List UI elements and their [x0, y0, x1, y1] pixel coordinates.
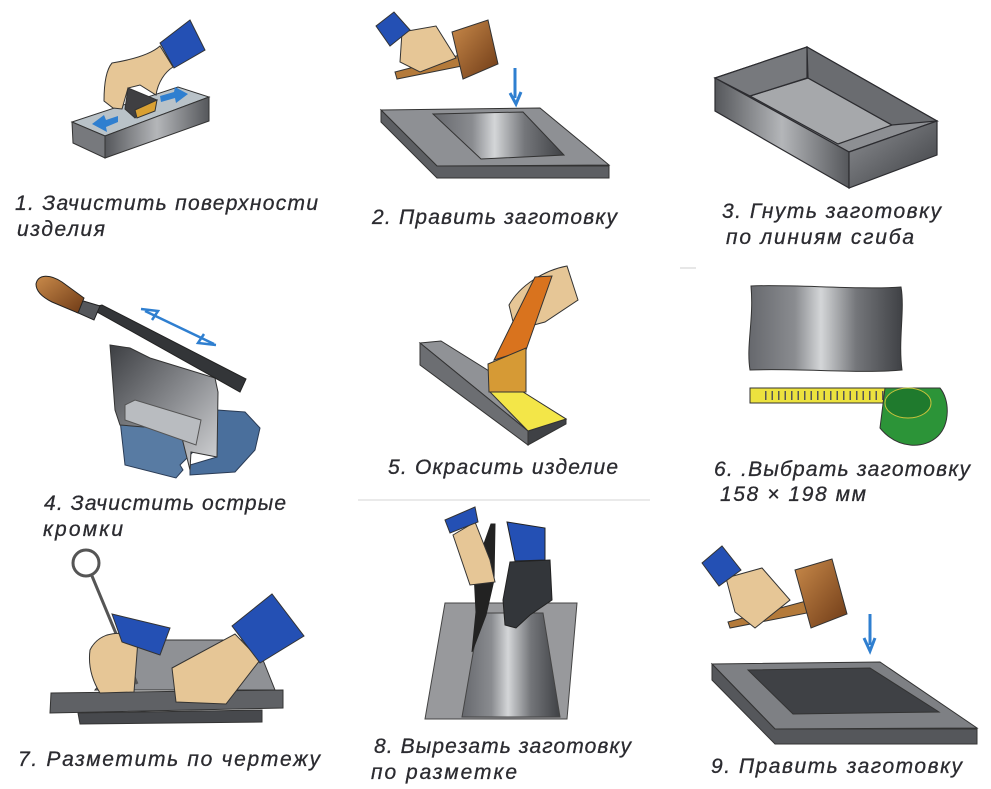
icon: brush and hand — [488, 266, 578, 392]
icon: shears — [472, 524, 495, 652]
panel: step 2 — [376, 12, 609, 178]
icon: metal sheet on plate — [381, 108, 609, 178]
icon: gloved hand — [503, 522, 552, 628]
icon: vise — [120, 410, 260, 478]
icon: metal workpiece — [110, 345, 218, 470]
icon: metal block — [72, 87, 209, 158]
icon: blue arrows — [92, 87, 188, 132]
icon: tape measure — [750, 388, 947, 445]
icon: vise jaw — [125, 400, 201, 445]
icon: down arrow — [510, 68, 521, 104]
icon: mallet and hand — [702, 546, 847, 628]
caption 2: 2. Править заготовку — [371, 206, 618, 229]
panel: step 9 — [702, 546, 977, 744]
icon: hands — [89, 594, 304, 704]
icon: open metal box — [715, 47, 937, 188]
icon: hand holding shears — [445, 507, 495, 585]
icon: mallet and hand — [376, 12, 498, 79]
caption 1: изделия — [17, 218, 105, 241]
caption 6: 158 × 198 мм — [720, 483, 866, 506]
panel: step 8 — [425, 507, 577, 719]
caption 3: 3. Гнуть заготовку — [722, 200, 942, 223]
caption 1: 1. Зачистить поверхности — [15, 192, 318, 215]
icon: file — [36, 276, 246, 392]
caption 5: 5. Окрасить изделие — [388, 456, 618, 479]
icon: metal sheet with cut — [425, 603, 577, 719]
panel: step 4 — [36, 276, 260, 478]
icon: painted bar — [420, 341, 566, 445]
icon: hand with sponge — [104, 20, 205, 118]
caption 4: 4. Зачистить острые — [44, 492, 286, 515]
icon: down arrow — [864, 614, 875, 651]
caption 1 — [15, 192, 318, 241]
panel: step 3 — [715, 47, 937, 188]
caption 3 — [722, 200, 942, 249]
caption 8: по разметке — [371, 761, 517, 784]
icon: wavy metal sheet — [749, 286, 902, 371]
caption 4 — [43, 492, 286, 541]
panel: step 6 — [749, 286, 947, 445]
icon: formed plate — [712, 662, 977, 744]
caption 8: 8. Вырезать заготовку — [374, 735, 632, 758]
panel: step 1 — [72, 20, 209, 158]
caption 3: по линиям сгиба — [726, 226, 914, 249]
caption 9: 9. Править заготовку — [711, 755, 964, 778]
caption 7: 7. Разметить по чертежу — [18, 748, 322, 771]
caption 4: кромки — [43, 518, 123, 541]
caption 6: 6. .Выбрать заготовку — [714, 458, 972, 481]
panel: step 7 — [50, 550, 304, 724]
caption 6 — [714, 458, 972, 506]
caption 8 — [371, 735, 632, 784]
icon: metal sheet and ruler — [50, 640, 283, 724]
panel: step 5 — [420, 266, 578, 445]
icon: scriber — [73, 550, 137, 684]
icon: double arrow — [141, 309, 216, 345]
